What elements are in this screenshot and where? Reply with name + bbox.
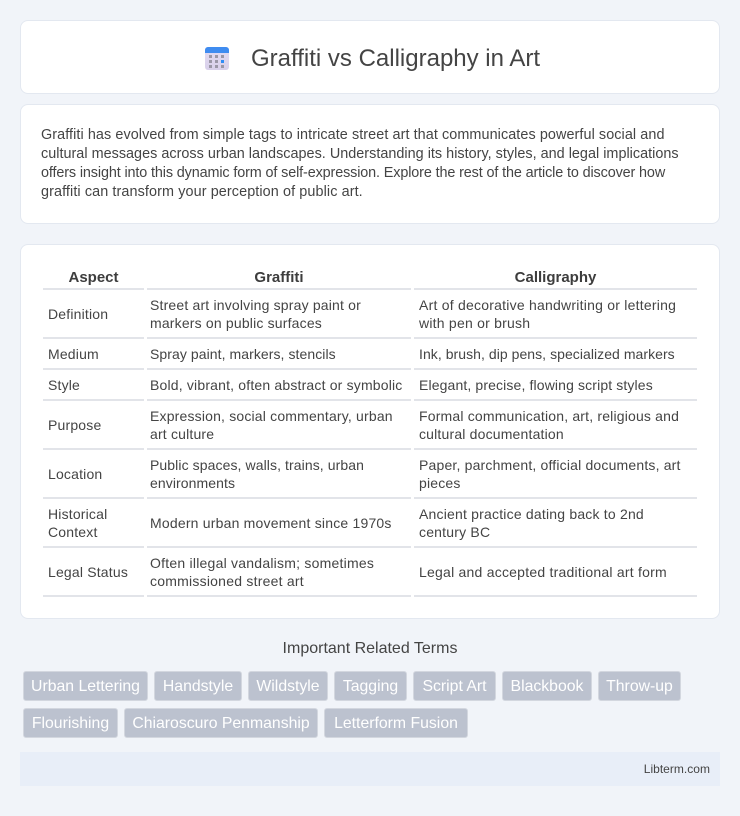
row: Style: Style bbox=[48, 377, 80, 393]
row: Location bbox=[48, 457, 681, 491]
tag: Urban Lettering bbox=[31, 678, 140, 695]
row: Historical Context: Ancient practice dating back to 2nd bbox=[419, 506, 644, 522]
row: Historical Context: Context bbox=[48, 524, 98, 540]
related term tags bbox=[23, 671, 681, 738]
tag bbox=[413, 671, 496, 701]
panel: intro text bbox=[20, 104, 720, 224]
row: Medium: Medium bbox=[48, 346, 99, 362]
row: Location: Location bbox=[48, 466, 102, 482]
row: Style: Bold, vibrant, often abstract or symbolic bbox=[150, 377, 402, 393]
tag bbox=[502, 671, 592, 701]
tag: Throw-up bbox=[606, 678, 673, 695]
footer bar bbox=[20, 752, 720, 786]
tag bbox=[23, 708, 118, 738]
comparison table bbox=[43, 269, 697, 597]
table header row: Aspect bbox=[68, 269, 119, 286]
row: Location: environments bbox=[150, 475, 235, 491]
table header row bbox=[68, 269, 596, 286]
row: Purpose bbox=[48, 408, 679, 442]
footer credit: Libterm.com bbox=[644, 762, 710, 776]
row: Style: Elegant, precise, flowing script styles bbox=[419, 377, 653, 393]
tag bbox=[23, 671, 148, 701]
row: Historical Context: Modern urban movement since 1970s bbox=[150, 515, 392, 531]
row: Definition: Street art involving spray paint or bbox=[150, 297, 361, 313]
tag: Wildstyle bbox=[256, 678, 320, 695]
row: Definition: markers on public surfaces bbox=[150, 315, 322, 331]
table header row: Graffiti bbox=[254, 269, 304, 286]
row: Purpose: Expression, social commentary, urban bbox=[150, 408, 393, 424]
row: Purpose: Purpose bbox=[48, 417, 101, 433]
table header row: Calligraphy bbox=[515, 269, 596, 286]
title: Graffiti vs Calligraphy in Art bbox=[251, 45, 540, 72]
row: Legal Status: Often illegal vandalism; sometimes bbox=[150, 555, 374, 571]
row: Definition bbox=[48, 297, 676, 331]
row: Location: Public spaces, walls, trains, urban bbox=[150, 457, 364, 473]
tag: Letterform Fusion bbox=[334, 715, 458, 732]
row: Purpose: art culture bbox=[150, 426, 214, 442]
row: Location: Paper, parchment, official documents, art bbox=[419, 457, 681, 473]
row: Legal Status: commissioned street art bbox=[150, 573, 304, 589]
tag bbox=[334, 671, 407, 701]
row: Historical Context bbox=[48, 506, 644, 540]
tag bbox=[124, 708, 318, 738]
tag bbox=[248, 671, 328, 701]
row: Historical Context: century BC bbox=[419, 524, 490, 540]
tag: Handstyle bbox=[163, 678, 233, 695]
row: Style bbox=[48, 377, 653, 393]
row: Purpose: cultural documentation bbox=[419, 426, 564, 442]
tag: Flourishing bbox=[32, 715, 109, 732]
tag: Blackbook bbox=[511, 678, 583, 695]
intro paragraph: graffiti can transform your perception of public art. bbox=[41, 184, 363, 200]
intro paragraph: Graffiti has evolved from simple tags to intricate street art that communicates powerful social and bbox=[41, 127, 665, 143]
tag: Chiaroscuro Penmanship bbox=[132, 715, 310, 732]
intro paragraph bbox=[41, 127, 679, 200]
row: Definition: Definition bbox=[48, 306, 108, 322]
row: Purpose: Formal communication, art, religious and bbox=[419, 408, 679, 424]
panel: header bbox=[20, 20, 720, 94]
tag bbox=[598, 671, 681, 701]
row: Definition: with pen or brush bbox=[419, 315, 530, 331]
row: Medium: Ink, brush, dip pens, specialized markers bbox=[419, 346, 675, 362]
panel: comparison table bbox=[20, 244, 720, 619]
intro paragraph: cultural messages across urban landscapes. Understanding its history, styles, and legal implications bbox=[41, 146, 679, 162]
intro paragraph: offers insight into this dynamic form of self-expression. Explore the rest of the article to discover how bbox=[41, 165, 665, 181]
row: Legal Status: Legal Status bbox=[48, 564, 128, 580]
tag bbox=[154, 671, 242, 701]
heading: related terms: Important Related Terms bbox=[283, 640, 457, 657]
tag: Script Art bbox=[422, 678, 487, 695]
tag bbox=[324, 708, 468, 738]
row: Definition: Art of decorative handwriting or lettering bbox=[419, 297, 676, 313]
icon: calendar bbox=[205, 47, 229, 70]
tag: Tagging bbox=[343, 678, 398, 695]
row: Legal Status: Legal and accepted traditional art form bbox=[419, 564, 667, 580]
row: Medium: Spray paint, markers, stencils bbox=[150, 346, 336, 362]
row: Historical Context: Historical bbox=[48, 506, 107, 522]
row: Legal Status bbox=[48, 555, 667, 589]
row: Location: pieces bbox=[419, 475, 461, 491]
row: Medium bbox=[48, 346, 675, 362]
